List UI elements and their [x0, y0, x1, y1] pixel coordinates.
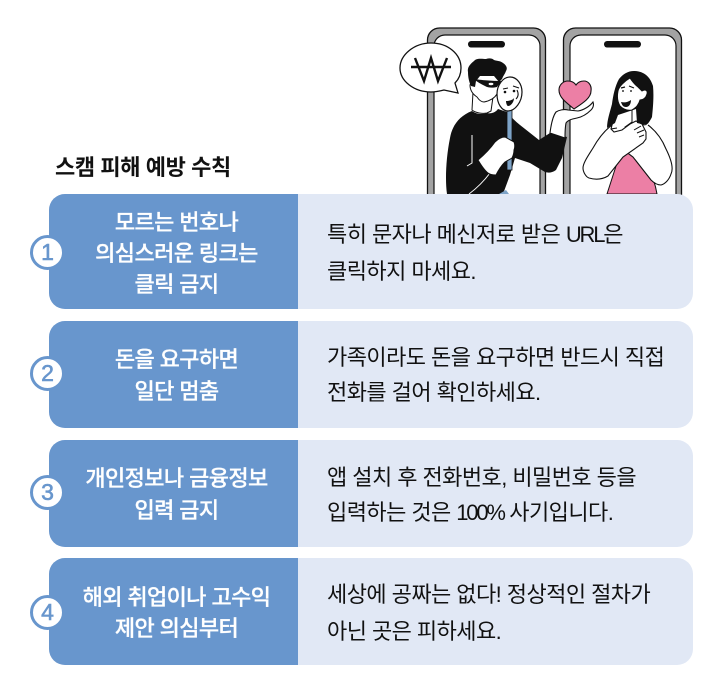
icon: woman figure [583, 71, 672, 194]
icon: number 3: 3 [41, 479, 54, 505]
rule 4 description: 세상에 공짜는 없다! 정상적인 절차가 [327, 582, 650, 607]
rule 4 title [49, 558, 298, 665]
rule 2 description: 가족이라도 돈을 요구하면 반드시 직접 [327, 345, 664, 370]
rule 1 title [49, 194, 298, 309]
rule 4 title: 제안 의심부터 [115, 616, 238, 640]
icon: number 4 [30, 595, 65, 630]
panel: rule 4 [49, 558, 693, 665]
rule 3 title: 입력 금지 [134, 498, 219, 523]
panel: rule 3 [49, 440, 693, 547]
rule 3 description [327, 465, 636, 525]
illustration: scam phones [399, 27, 682, 195]
rule 3 description: 입력하는 것은 100% 사기입니다. [327, 500, 613, 525]
rule 1 description [327, 222, 623, 284]
icon: number 1: 1 [41, 239, 54, 265]
icon: right phone [564, 28, 682, 195]
icon: mask on a stick [478, 77, 522, 175]
rule 1 description: 클릭하지 마세요. [327, 259, 476, 284]
icon: heart [559, 81, 591, 109]
icon: number 1 [30, 235, 65, 270]
icon: speech bubble with won sign [400, 43, 461, 93]
panel: rule 1 [49, 194, 693, 309]
icon: number 3 [30, 475, 65, 510]
rule 1 title: 모르는 번호나 [115, 210, 238, 235]
icon: left phone [428, 28, 546, 195]
rule 2 title [49, 321, 298, 428]
rule 1 title: 클릭 금지 [134, 272, 219, 297]
panel: rule 2 [49, 321, 693, 428]
rule 1 description: 특히 문자나 메신저로 받은 URL은 [327, 222, 623, 247]
rule 2 description: 전화를 걸어 확인하세요. [327, 380, 541, 405]
rule 2 description [327, 345, 664, 405]
rule 3 title: 개인정보나 금융정보 [85, 466, 268, 491]
icon: scammer figure [446, 58, 593, 194]
rule 1 title: 의심스러운 링크는 [95, 241, 258, 266]
rule 4 description: 아닌 곳은 피하세요. [327, 619, 501, 644]
rule 3 title [49, 440, 298, 547]
icon: number 4: 4 [41, 599, 54, 625]
rule 2 title: 일단 멈춤 [134, 379, 219, 404]
heading: 스캠 피해 예방 수칙 [55, 155, 231, 180]
rule 4 description [327, 582, 650, 644]
rule 3 description: 앱 설치 후 전화번호, 비밀번호 등을 [327, 465, 636, 490]
icon: number 2 [30, 356, 65, 391]
rule 2 title: 돈을 요구하면 [115, 347, 238, 372]
icon: number 2: 2 [41, 360, 54, 386]
rule 4 title: 해외 취업이나 고수익 [83, 584, 270, 610]
